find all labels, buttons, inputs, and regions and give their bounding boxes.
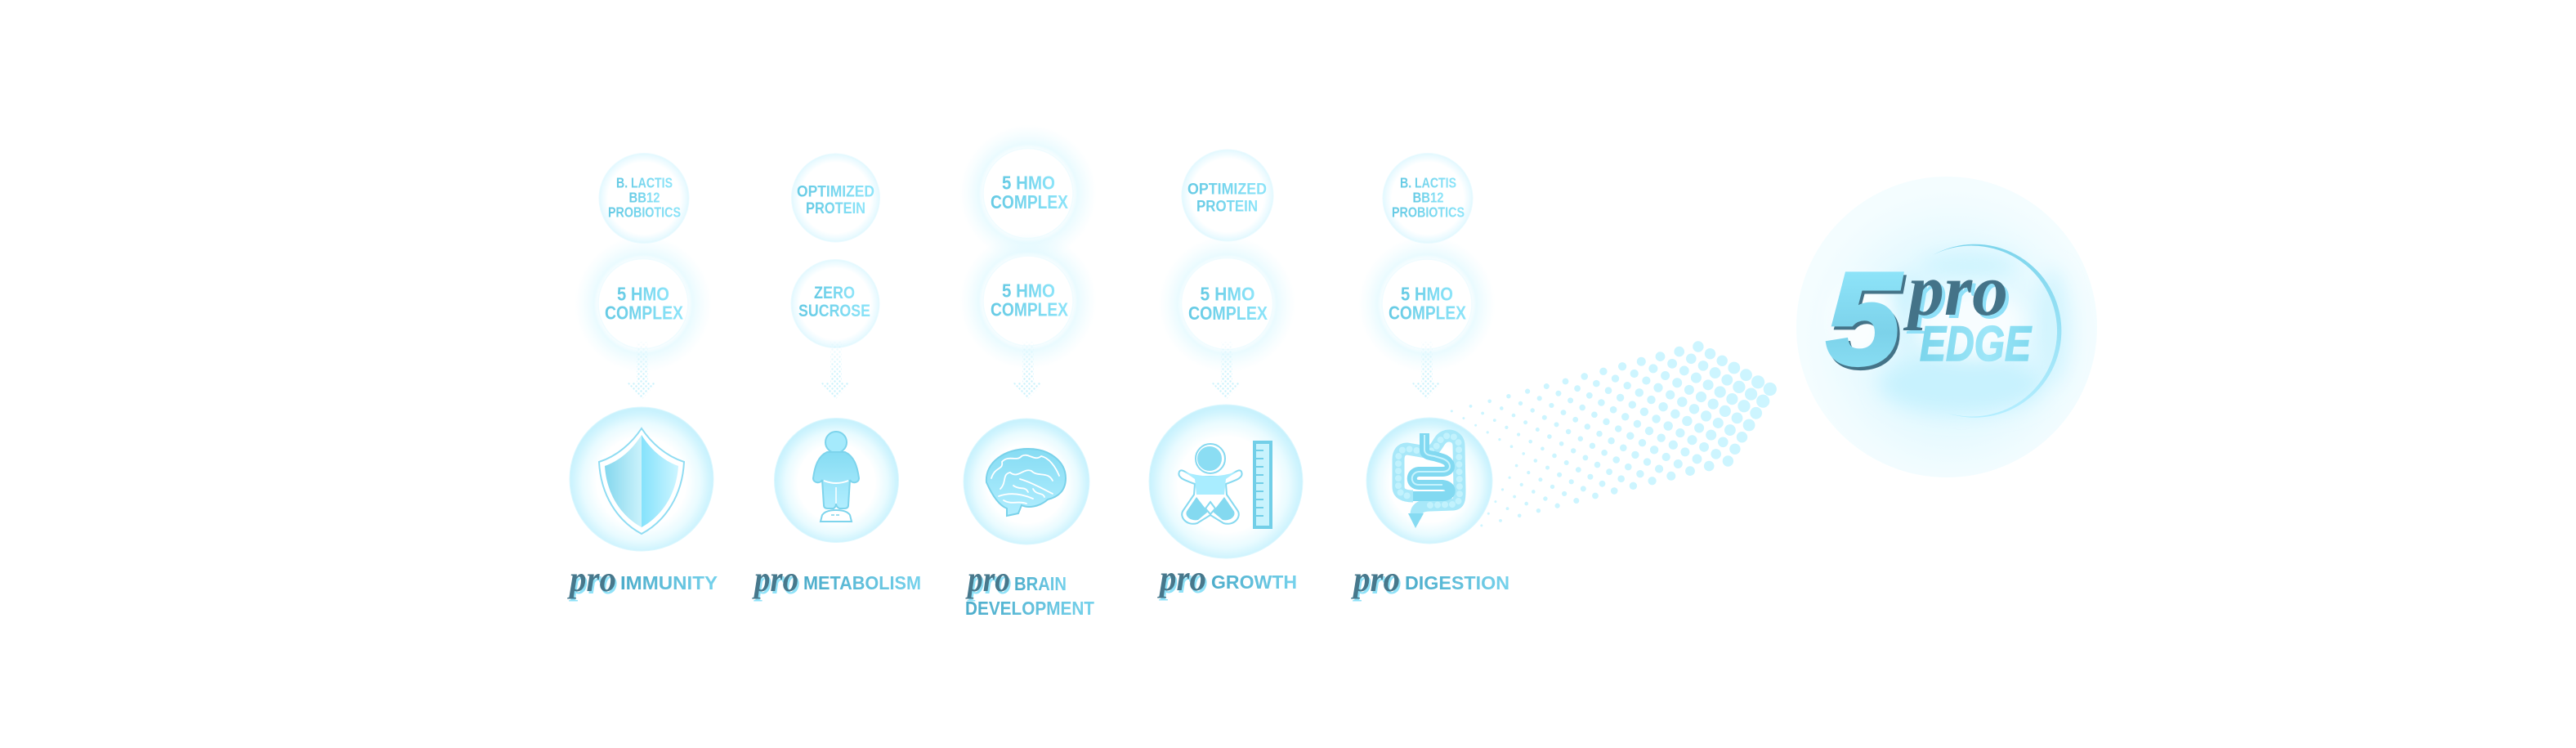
word edge: EDGE: [1920, 316, 2033, 371]
bubble: b. lactis bb12 probiotics: BB12: [1412, 190, 1444, 206]
bubble: 5 hmo complex: [1358, 235, 1496, 373]
bubble: 5 hmo complex top: COMPLEX: [991, 191, 1069, 213]
label: pro digestion: [1350, 559, 1509, 602]
arc swoosh: [1933, 244, 2061, 418]
logo glow: [1831, 280, 2025, 361]
label: pro digestion: pro: [1352, 562, 1402, 602]
label: pro brain development: [965, 559, 1095, 619]
bubble: optimized protein: [791, 154, 879, 242]
bubble: 5 hmo complex: COMPLEX: [1188, 302, 1268, 324]
bubble: 5 hmo complex: 5 HMO: [1401, 283, 1453, 304]
bubble: intestine icon: [1366, 418, 1492, 544]
logo bubble: [1796, 177, 2097, 477]
column: pro digestion: [1350, 154, 1509, 602]
dotted halftone trail: [1451, 341, 1777, 526]
arrow: [821, 342, 852, 399]
numeral 5: 5: [1827, 245, 1902, 392]
label: pro immunity: [566, 559, 718, 602]
label: pro growth: GROWTH: [1211, 571, 1297, 593]
label: pro growth: pro: [1158, 561, 1208, 601]
word pro: pro: [1906, 253, 2011, 334]
bubble: zero sucrose: [791, 260, 879, 348]
bubble: zero sucrose: ZERO: [814, 284, 855, 302]
column: pro metabolism: [751, 154, 921, 602]
bubble: b. lactis bb12 probiotics: BB12: [629, 190, 660, 206]
bubble: 5 hmo complex: [1159, 235, 1296, 373]
label: pro brain development: DEVELOPMENT: [965, 598, 1095, 619]
column: pro immunity: [566, 154, 718, 602]
label: pro metabolism: pro: [753, 562, 800, 602]
arrow: [1013, 342, 1044, 399]
bubble: 5 hmo complex top: [959, 124, 1097, 262]
bubble: optimized protein: PROTEIN: [806, 200, 865, 217]
logo: 5 pro edge bubble: [1796, 177, 2097, 477]
label: pro metabolism: pro: [751, 559, 798, 599]
label: pro digestion: DIGESTION: [1405, 572, 1509, 593]
bubble: person on scale icon: [775, 419, 899, 543]
bubble: brain icon: [964, 419, 1089, 544]
bubble: optimized protein: OPTIMIZED: [1187, 181, 1267, 198]
bubble: optimized protein: [1182, 150, 1273, 241]
column: pro brain development: [959, 124, 1097, 619]
bubble: b. lactis bb12 probiotics: PROBIOTICS: [608, 204, 681, 221]
bubble: 5 hmo complex: COMPLEX: [605, 302, 684, 324]
bubble: shield icon: [570, 407, 713, 551]
bubble: optimized protein: OPTIMIZED: [797, 183, 874, 201]
numeral 5: 5: [1829, 249, 1904, 395]
label: pro metabolism: [751, 559, 921, 602]
bubble: 5 hmo complex top: 5 HMO: [1002, 172, 1055, 193]
column: pro growth: [1149, 150, 1303, 601]
bubble: b. lactis bb12 probiotics: [599, 154, 689, 244]
word pro: pro: [1903, 250, 2008, 331]
bubble: b. lactis bb12 probiotics: PROBIOTICS: [1392, 204, 1465, 221]
bubble: optimized protein: PROTEIN: [1196, 198, 1258, 216]
label: pro digestion: pro: [1350, 559, 1400, 599]
arrow: [1211, 342, 1242, 399]
label: pro brain development: pro: [965, 559, 1010, 599]
bubble: 5 hmo complex: [959, 232, 1097, 370]
bubble: b. lactis bb12 probiotics: [1383, 154, 1473, 244]
label: pro immunity: pro: [568, 562, 618, 602]
logo haze: [1880, 253, 2068, 414]
label: pro growth: pro: [1156, 558, 1206, 598]
label: pro metabolism: METABOLISM: [803, 572, 921, 593]
bubble: 5 hmo complex: COMPLEX: [1389, 302, 1467, 324]
bubble: 5 hmo complex: [575, 235, 712, 373]
bubble: b. lactis bb12 probiotics: B. LACTIS: [616, 175, 673, 191]
bubble: 5 hmo complex: COMPLEX: [991, 299, 1069, 320]
bubble: 5 hmo complex: 5 HMO: [617, 283, 669, 304]
bubble: baby and ruler icon: [1149, 405, 1303, 558]
bubble: 5 hmo complex: 5 HMO: [1200, 283, 1255, 304]
arrow: [627, 342, 658, 399]
bubble: b. lactis bb12 probiotics: B. LACTIS: [1400, 175, 1456, 191]
label: pro immunity: pro: [566, 559, 616, 599]
arrow: [1411, 342, 1442, 399]
label: pro growth: [1156, 558, 1297, 601]
bubble: 5 hmo complex: 5 HMO: [1002, 280, 1055, 301]
bubble: zero sucrose: SUCROSE: [798, 302, 870, 320]
label: pro brain development: pro: [967, 562, 1012, 602]
label: pro brain development: BRAIN: [1014, 573, 1067, 594]
label: pro immunity: IMMUNITY: [620, 572, 718, 593]
